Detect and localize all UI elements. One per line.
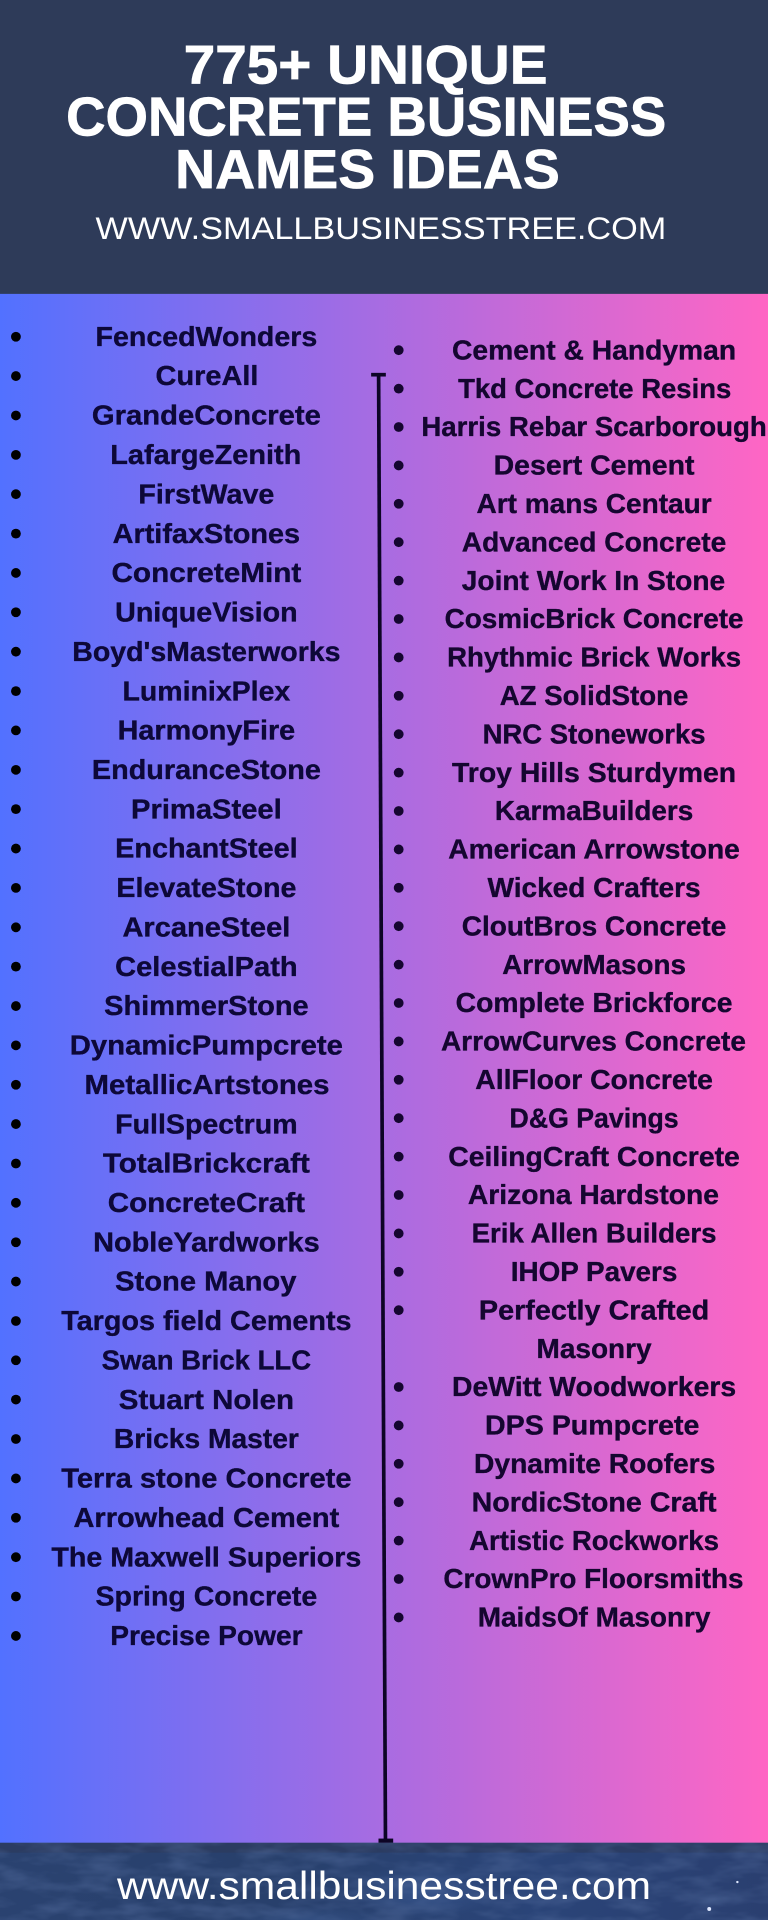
- name: ShimmerStone: [11, 990, 309, 1021]
- name: IHOP Pavers: [394, 1256, 677, 1287]
- name: Desert Cement: [394, 450, 695, 481]
- name: Arizona Hardstone: Arizona Hardstone: [468, 1179, 719, 1210]
- website subtitle: WWW.SMALLBUSINESSTREE.COM: [96, 211, 666, 246]
- name: Rhythmic Brick Works: Rhythmic Brick Works: [447, 642, 741, 673]
- name: PrimaSteel: [11, 793, 282, 824]
- name: NobleYardworks: NobleYardworks: [93, 1226, 320, 1257]
- name: Wicked Crafters: Wicked Crafters: [488, 872, 701, 903]
- name: ConcreteMint: ConcreteMint: [111, 557, 302, 588]
- right column of business names: [394, 334, 767, 1633]
- title: [66, 33, 666, 200]
- name: Swan Brick LLC: [11, 1344, 311, 1375]
- name: UniqueVision: [11, 596, 298, 627]
- name: CloutBros Concrete: CloutBros Concrete: [462, 910, 726, 941]
- name: CeilingCraft Concrete: CeilingCraft Concrete: [448, 1141, 740, 1172]
- name: FullSpectrum: FullSpectrum: [115, 1108, 298, 1139]
- name: The Maxwell Superiors: The Maxwell Superiors: [51, 1541, 361, 1572]
- name: GrandeConcrete: GrandeConcrete: [92, 400, 321, 431]
- name: DPS Pumpcrete: [394, 1410, 699, 1441]
- name: Precise Power: Precise Power: [110, 1620, 303, 1651]
- name: ArcaneSteel: ArcaneSteel: [122, 911, 290, 942]
- name: D&G Pavings: [394, 1102, 679, 1133]
- name: LafargeZenith: LafargeZenith: [110, 439, 301, 470]
- name: EnduranceStone: EnduranceStone: [92, 754, 321, 785]
- name: IHOP Pavers: IHOP Pavers: [511, 1256, 677, 1287]
- name: AllFloor Concrete: AllFloor Concrete: [475, 1064, 713, 1095]
- name: NRC Stoneworks: NRC Stoneworks: [483, 718, 706, 749]
- name: HarmonyFire: [11, 715, 295, 746]
- name: Joint Work In Stone: Joint Work In Stone: [462, 565, 725, 596]
- name: LuminixPlex: [11, 675, 291, 706]
- title: 775+ UNIQUE: [184, 33, 548, 95]
- name: CureAll: [11, 360, 258, 391]
- name: Advanced Concrete: Advanced Concrete: [462, 526, 726, 557]
- name: Bricks Master: Bricks Master: [114, 1423, 299, 1454]
- name: Terra stone Concrete: Terra stone Concrete: [61, 1463, 352, 1494]
- name: ConcreteMint: [11, 557, 302, 588]
- footer website text: www.smallbusinesstree.com: [116, 1865, 651, 1908]
- name: ConcreteCraft: [11, 1187, 306, 1218]
- name: TotalBrickcraft: TotalBrickcraft: [103, 1148, 311, 1179]
- name: KarmaBuilders: [394, 795, 693, 826]
- name: MaidsOf Masonry: MaidsOf Masonry: [478, 1602, 711, 1633]
- name: Targos field Cements: Targos field Cements: [61, 1305, 352, 1336]
- name: EnchantSteel: [11, 833, 298, 864]
- name: Erik Allen Builders: Erik Allen Builders: [472, 1218, 717, 1249]
- name: FencedWonders: FencedWonders: [96, 321, 317, 352]
- title: NAMES IDEAS: [175, 138, 560, 200]
- name: CureAll: CureAll: [156, 360, 258, 391]
- name: LuminixPlex: LuminixPlex: [122, 675, 291, 706]
- name: Desert Cement: Desert Cement: [494, 450, 695, 481]
- name: MetallicArtstones: MetallicArtstones: [85, 1069, 329, 1100]
- name: NordicStone Craft: NordicStone Craft: [472, 1486, 717, 1517]
- name: D&G Pavings: D&G Pavings: [510, 1102, 679, 1133]
- name: Harris Rebar Scarborough: Harris Rebar Scarborough: [421, 411, 767, 442]
- left column of business names: [11, 321, 361, 1651]
- name: Cement & Handyman: Cement & Handyman: [452, 334, 736, 365]
- name: FullSpectrum: [11, 1108, 298, 1139]
- name: DeWitt Woodworkers: DeWitt Woodworkers: [452, 1371, 736, 1402]
- name: TotalBrickcraft: [11, 1148, 311, 1179]
- name: LafargeZenith: [11, 439, 301, 470]
- name: AZ SolidStone: AZ SolidStone: [500, 680, 688, 711]
- name: CosmicBrick Concrete: CosmicBrick Concrete: [445, 603, 744, 634]
- footer panel: [0, 1843, 768, 1920]
- name: FirstWave: [11, 478, 274, 509]
- name: EnchantSteel: EnchantSteel: [115, 833, 298, 864]
- name: Art mans Centaur: Art mans Centaur: [476, 488, 712, 519]
- column divider line: [371, 373, 393, 1843]
- name: Troy Hills Sturdymen: Troy Hills Sturdymen: [452, 757, 736, 788]
- name: HarmonyFire: HarmonyFire: [118, 715, 295, 746]
- name: ElevateStone: [11, 872, 296, 903]
- name: American Arrowstone: American Arrowstone: [448, 834, 740, 865]
- header panel: [0, 0, 768, 294]
- name: CelestialPath: CelestialPath: [115, 951, 298, 982]
- name: CelestialPath: [11, 951, 298, 982]
- name: KarmaBuilders: KarmaBuilders: [495, 795, 693, 826]
- name: ElevateStone: ElevateStone: [116, 872, 296, 903]
- name: ConcreteCraft: ConcreteCraft: [108, 1187, 306, 1218]
- name: Perfectly Crafted Masonry: Masonry: [536, 1333, 652, 1364]
- name: PrimaSteel: PrimaSteel: [131, 793, 282, 824]
- name: Perfectly Crafted Masonry: [394, 1294, 709, 1364]
- name: ArrowMasons: [394, 949, 686, 980]
- name: ShimmerStone: ShimmerStone: [104, 990, 309, 1021]
- name: Bricks Master: [11, 1423, 299, 1454]
- name: DynamicPumpcrete: DynamicPumpcrete: [70, 1030, 343, 1061]
- name: ArrowCurves Concrete: ArrowCurves Concrete: [441, 1026, 746, 1057]
- name: ArcaneSteel: [11, 911, 290, 942]
- name: FirstWave: FirstWave: [138, 478, 274, 509]
- name: UniqueVision: UniqueVision: [115, 596, 298, 627]
- name: Precise Power: [11, 1620, 303, 1651]
- name: Complete Brickforce: Complete Brickforce: [456, 987, 732, 1018]
- title: CONCRETE BUSINESS: [66, 85, 666, 147]
- name: Wicked Crafters: [394, 872, 701, 903]
- name: Arrowhead Cement: Arrowhead Cement: [73, 1502, 340, 1533]
- name: Dynamite Roofers: Dynamite Roofers: [474, 1448, 715, 1479]
- name: Spring Concrete: Spring Concrete: [96, 1581, 317, 1612]
- name: ArtifaxStones: [11, 518, 300, 549]
- name: CrownPro Floorsmiths: CrownPro Floorsmiths: [443, 1563, 744, 1594]
- name: AZ SolidStone: [394, 680, 688, 711]
- name: ArtifaxStones: ArtifaxStones: [113, 518, 300, 549]
- name: DPS Pumpcrete: DPS Pumpcrete: [485, 1410, 699, 1441]
- name: Perfectly Crafted Masonry: Perfectly Crafted: [479, 1294, 709, 1325]
- name: Stone Manoy: [11, 1266, 297, 1297]
- name: Stuart Nolen: [11, 1384, 294, 1415]
- name: ArrowMasons: ArrowMasons: [502, 949, 686, 980]
- name: Boyd'sMasterworks: Boyd'sMasterworks: [72, 636, 341, 667]
- name: Stuart Nolen: Stuart Nolen: [119, 1384, 294, 1415]
- name: Stone Manoy: Stone Manoy: [115, 1266, 297, 1297]
- name: Tkd Concrete Resins: Tkd Concrete Resins: [458, 373, 731, 404]
- name: Artistic Rockworks: Artistic Rockworks: [469, 1525, 719, 1556]
- name: Swan Brick LLC: Swan Brick LLC: [102, 1344, 311, 1375]
